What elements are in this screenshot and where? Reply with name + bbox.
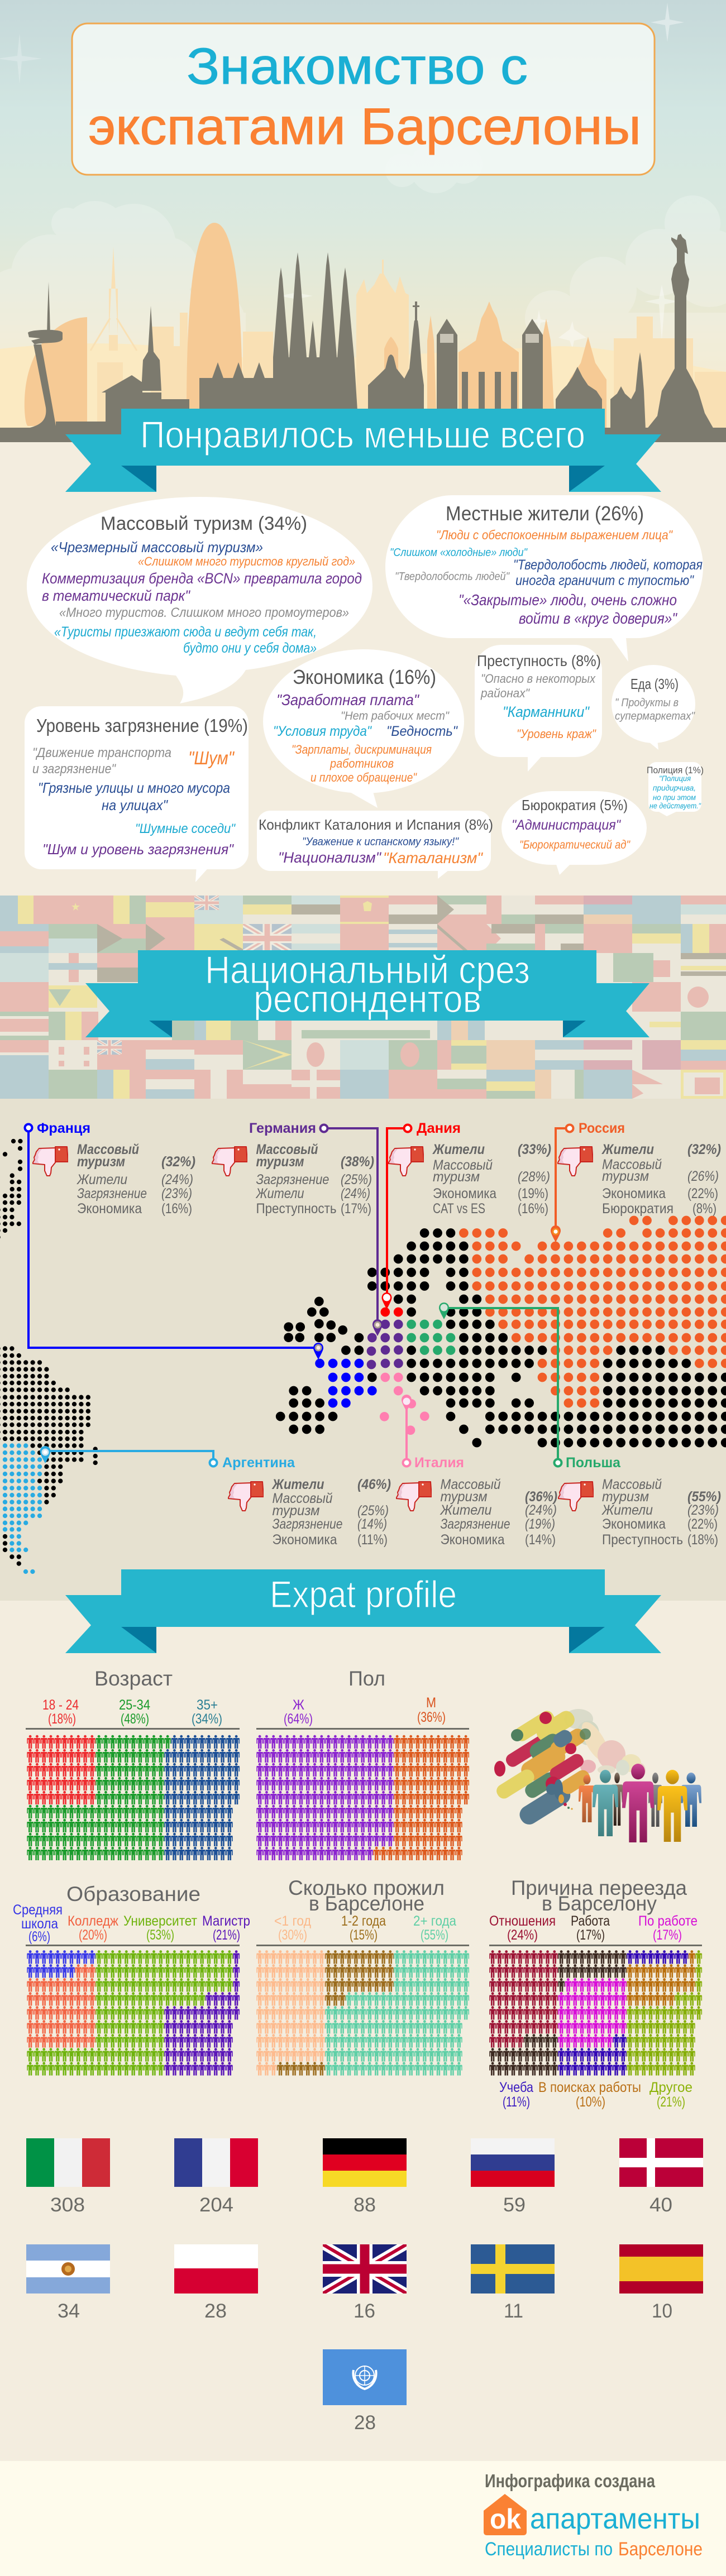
legend: (21%) bbox=[213, 1927, 240, 1943]
heading bbox=[511, 1876, 687, 1915]
ranking: Poland: Преступность bbox=[602, 1532, 683, 1548]
chart: gender bbox=[256, 1667, 469, 1860]
tagline: Специалисты по bbox=[485, 2539, 613, 2560]
ranking: Poland: (22%) bbox=[687, 1516, 718, 1532]
ranking: Denmark bbox=[388, 1142, 551, 1217]
section banner: expat profile bbox=[65, 1569, 661, 1653]
ranking: Denmark: (19%) bbox=[518, 1186, 548, 1201]
ranking: Russia: (26%) bbox=[687, 1169, 719, 1184]
ranking: Argentina: Массовый bbox=[273, 1491, 333, 1506]
ranking: Russia: Бюрократия bbox=[602, 1201, 674, 1217]
top legend: (24%) bbox=[507, 1927, 538, 1943]
ranking: Italy: Экономика bbox=[440, 1532, 505, 1548]
ranking: France: Экономика bbox=[77, 1201, 142, 1217]
dot map: Americas bbox=[0, 1141, 95, 1572]
quotes: "Бедность" bbox=[386, 724, 458, 739]
legend: 35+ bbox=[197, 1697, 218, 1713]
ranking: Denmark: Массовый bbox=[433, 1157, 493, 1173]
ranking: Poland bbox=[558, 1477, 721, 1548]
legend: 2+ года bbox=[413, 1913, 456, 1929]
logo: okapartments: ok bbox=[490, 2503, 521, 2535]
quotes: "Движение транспорта bbox=[32, 745, 171, 760]
ranking: Poland: Экономика bbox=[602, 1516, 666, 1532]
flag: United Nations 28: 28 bbox=[354, 2412, 376, 2434]
logo: okapartments: апартаменты bbox=[530, 2503, 700, 2535]
heading bbox=[288, 1876, 445, 1915]
legend: школа bbox=[21, 1916, 58, 1932]
quotes bbox=[390, 528, 703, 627]
quotes: иногда граничит с тупостью" bbox=[515, 573, 694, 588]
flag: Sweden 11: 11 bbox=[504, 2300, 523, 2322]
tagline: Барселоне bbox=[618, 2539, 703, 2560]
flag: Poland 28 bbox=[174, 2244, 258, 2322]
quotes: работников bbox=[329, 756, 394, 770]
legend: (34%) bbox=[192, 1711, 222, 1727]
ranking: Argentina: (11%) bbox=[357, 1532, 388, 1548]
bottom legend: Учеба bbox=[499, 2080, 533, 2095]
flag: Russia 59: 59 bbox=[503, 2194, 526, 2216]
flag: France 204: 204 bbox=[199, 2194, 233, 2216]
quotes bbox=[42, 539, 362, 656]
chart: reason for moving to Barcelona bbox=[489, 1876, 702, 2110]
quotes: "Шум и уровень загрязнения" bbox=[42, 841, 235, 858]
flag: United Nations 28 bbox=[323, 2349, 407, 2434]
bottom legend: (10%) bbox=[576, 2094, 605, 2110]
connector: Poland: Польша bbox=[566, 1455, 621, 1471]
flag: Denmark 40: 40 bbox=[649, 2194, 672, 2216]
bottom legend bbox=[499, 2080, 692, 2110]
ranking: France: Массовый bbox=[77, 1142, 139, 1157]
quotes: "Администрация" bbox=[512, 817, 621, 833]
connector: France bbox=[25, 1121, 323, 1359]
Argentina dots bbox=[5, 1445, 40, 1572]
flag: Italy 308: 308 bbox=[50, 2194, 85, 2216]
Germany dots bbox=[371, 1324, 399, 1364]
bubble: crime bbox=[475, 645, 602, 772]
ranking: Germany bbox=[212, 1142, 374, 1217]
quotes: войти в «круг доверия»" bbox=[519, 610, 677, 627]
section banner: national breakdown bbox=[85, 948, 649, 1037]
ranking: Italy: туризм bbox=[440, 1489, 487, 1505]
quotes: "Люди с обеспокоенным выражением лица" bbox=[436, 528, 674, 542]
legend: Университет bbox=[123, 1913, 197, 1929]
logo: okapartments bbox=[484, 2494, 700, 2535]
heading: Конфликт Каталония и Испания (8%) bbox=[259, 816, 493, 833]
quotes: «Чрезмерный массовый туризм» bbox=[51, 539, 263, 556]
quotes: Коммертизация бренда «BCN» превратила город bbox=[42, 570, 362, 587]
France dots bbox=[320, 1363, 372, 1403]
ranking: Poland: туризм bbox=[602, 1489, 649, 1505]
ranking: France: (32%) bbox=[161, 1154, 195, 1170]
flag: Germany 88: 88 bbox=[354, 2194, 376, 2216]
connector: Russia bbox=[551, 1121, 625, 1242]
ranking: Poland: Массовый bbox=[602, 1477, 662, 1492]
Russia dots bbox=[464, 1220, 726, 1403]
quotes bbox=[512, 817, 631, 851]
legend: (30%) bbox=[278, 1927, 307, 1943]
ranking: Poland: (55%) bbox=[687, 1489, 721, 1505]
illustration: crowd with speech bubble cloud bbox=[474, 1699, 701, 1842]
flag: United Kingdom 16 bbox=[323, 2244, 407, 2322]
connector: Germany: Германия bbox=[249, 1121, 316, 1136]
bubble: food bbox=[612, 665, 695, 750]
credit line: Инфографика создана bbox=[485, 2470, 656, 2491]
legend: Колледж bbox=[68, 1913, 118, 1929]
connector: Denmark: Дания bbox=[417, 1121, 461, 1136]
quotes: "Уровень краж" bbox=[517, 727, 596, 741]
bubble: locals bbox=[385, 495, 703, 662]
quotes: "Карманники" bbox=[503, 703, 590, 720]
ranking: Argentina: (25%) bbox=[357, 1503, 389, 1519]
ranking: Italy bbox=[396, 1477, 557, 1548]
ranking: Denmark: (28%) bbox=[518, 1169, 550, 1185]
footer: credit bbox=[484, 2470, 703, 2560]
quotes bbox=[480, 672, 596, 741]
flag: Russia 59 bbox=[471, 2138, 555, 2216]
legend bbox=[13, 1902, 250, 1945]
connector: Italy bbox=[402, 1395, 464, 1471]
legend: (53%) bbox=[146, 1927, 174, 1943]
quotes: придирчива, bbox=[653, 783, 696, 792]
legend bbox=[42, 1697, 222, 1727]
top legend: Отношения bbox=[489, 1913, 556, 1929]
legend: Ж bbox=[293, 1697, 304, 1713]
ranking: Argentina: (14%) bbox=[357, 1516, 387, 1532]
connector: Argentina bbox=[40, 1446, 295, 1471]
ranking: Italy: Массовый bbox=[440, 1477, 501, 1492]
ranking: Denmark: Экономика bbox=[433, 1186, 496, 1201]
Denmark dots bbox=[385, 1308, 399, 1316]
legend: (20%) bbox=[79, 1927, 107, 1943]
ranking: Argentina: Жители bbox=[271, 1477, 324, 1492]
banner heading: Понравилось меньше всего bbox=[140, 414, 585, 456]
connector: France: Франця bbox=[37, 1121, 90, 1136]
quotes: супермаркетах" bbox=[615, 710, 695, 722]
flag: Spain 10 bbox=[619, 2244, 703, 2322]
connector: Germany bbox=[249, 1121, 383, 1336]
ranking: France: Загрязнение bbox=[77, 1186, 147, 1201]
heading: Сколько прожил bbox=[288, 1876, 445, 1899]
heading: Бюрократия (5%) bbox=[522, 797, 628, 813]
heading: в Барселону bbox=[542, 1892, 657, 1915]
bubble: mass tourism bbox=[27, 497, 372, 703]
pictogram bbox=[256, 1950, 469, 2076]
legend: (36%) bbox=[417, 1710, 446, 1725]
pictogram bbox=[27, 1735, 240, 1860]
connector: Italy: Италия bbox=[414, 1455, 464, 1471]
quotes: "Твердолобость людей" bbox=[395, 571, 510, 583]
legend: <1 год bbox=[274, 1913, 311, 1929]
ranking: Russia bbox=[557, 1142, 721, 1217]
quotes: «Много туристов. Слишком много промоутеров» bbox=[59, 605, 349, 620]
title line 2: экспатами Барселоны bbox=[88, 98, 641, 155]
flag: Argentina 34 bbox=[26, 2244, 110, 2322]
dot map: Europe and Russia bbox=[280, 1220, 726, 1443]
quotes: "Шумные соседи" bbox=[135, 821, 236, 836]
pictogram bbox=[27, 1950, 240, 2076]
ranking: Poland: (23%) bbox=[687, 1502, 719, 1518]
ranking: Denmark: CAT vs ES bbox=[433, 1201, 485, 1217]
banner heading line 2: респондентов bbox=[254, 977, 481, 1021]
speech bubble cloud bbox=[474, 1699, 646, 1831]
ranking: Germany: (17%) bbox=[341, 1201, 371, 1217]
ranking: Russia: туризм bbox=[602, 1169, 649, 1184]
ranking: Argentina bbox=[228, 1477, 391, 1548]
quotes: "Опасно в некоторых bbox=[481, 672, 596, 686]
heading: Местные жители (26%) bbox=[446, 502, 644, 525]
quotes: "Каталанизм" bbox=[383, 849, 483, 866]
heading: Возраст bbox=[94, 1667, 173, 1690]
people bbox=[579, 1764, 701, 1842]
ranking: Germany: Загрязнение bbox=[256, 1172, 329, 1188]
legend: (48%) bbox=[121, 1711, 149, 1727]
legend: (18%) bbox=[48, 1711, 76, 1727]
bubble: bureaucracy bbox=[501, 791, 647, 875]
ranking: Denmark: (16%) bbox=[518, 1201, 548, 1217]
quotes: "Грязные улицы и много мусора bbox=[38, 779, 230, 796]
bubble: economy bbox=[263, 649, 464, 808]
legend: (15%) bbox=[350, 1927, 378, 1943]
legend: М bbox=[426, 1695, 436, 1711]
legend: (64%) bbox=[284, 1711, 313, 1727]
quotes: будто они у себя дома» bbox=[183, 640, 317, 656]
top legend bbox=[489, 1913, 698, 1943]
heading: Уровень загрязнение (19%) bbox=[36, 715, 248, 736]
ranking: Argentina: Экономика bbox=[273, 1532, 337, 1548]
ranking: Denmark: (33%) bbox=[518, 1142, 551, 1157]
heading: Полиция (1%) bbox=[647, 765, 704, 775]
flag: France 204 bbox=[174, 2138, 258, 2216]
North America dots bbox=[0, 1141, 95, 1564]
quotes: «Туристы приезжают сюда и ведут себя так, bbox=[54, 624, 317, 640]
ranking: Denmark: Жители bbox=[432, 1142, 485, 1157]
top legend: (17%) bbox=[576, 1927, 605, 1943]
ranking: Italy: (14%) bbox=[525, 1532, 556, 1548]
quotes: "Твердолобость людей, которая bbox=[513, 557, 703, 573]
legend: (55%) bbox=[421, 1927, 448, 1943]
Italy dots bbox=[384, 1377, 424, 1430]
flag: Denmark 40 bbox=[619, 2138, 703, 2216]
ranking: Germany: (25%) bbox=[341, 1172, 372, 1188]
flag: Spain 10: 10 bbox=[652, 2300, 672, 2322]
quotes: "Зарплаты, дискриминация bbox=[292, 743, 432, 756]
ranking: Russia: (22%) bbox=[687, 1186, 718, 1201]
flag: United Kingdom 16: 16 bbox=[354, 2300, 375, 2322]
legend bbox=[274, 1913, 456, 1943]
ranking: Denmark: туризм bbox=[433, 1169, 480, 1185]
ranking: France: Жители bbox=[76, 1172, 127, 1188]
legend: 25-34 bbox=[119, 1697, 150, 1713]
ranking: Russia: Жители bbox=[601, 1142, 654, 1157]
heading: в Барселоне bbox=[309, 1892, 424, 1915]
top legend: (17%) bbox=[653, 1927, 682, 1943]
top legend: По работе bbox=[638, 1913, 698, 1929]
banner heading line 1: Национальный срез bbox=[205, 948, 530, 992]
legend: (6%) bbox=[28, 1929, 50, 1945]
legend: 18 - 24 bbox=[42, 1697, 79, 1713]
chart: age bbox=[26, 1667, 240, 1860]
ranking: Poland: Жители bbox=[601, 1502, 653, 1518]
ranking: France: (23%) bbox=[161, 1186, 192, 1201]
heading: Массовый туризм (34%) bbox=[101, 513, 307, 534]
bottom legend: Другое bbox=[649, 2080, 692, 2095]
ranking: Poland: (18%) bbox=[687, 1532, 718, 1548]
quotes: "Нет рабочих мест" bbox=[341, 710, 450, 722]
flag: Argentina 34: 34 bbox=[58, 2300, 80, 2322]
ranking: Argentina: (46%) bbox=[357, 1477, 391, 1492]
ranking: Italy: (24%) bbox=[525, 1502, 557, 1518]
ranking: France bbox=[32, 1142, 195, 1217]
quotes: "Слишком «холодные» люди" bbox=[390, 547, 528, 559]
connector: Russia: Россия bbox=[579, 1121, 625, 1136]
flag: Poland 28: 28 bbox=[204, 2300, 227, 2322]
quotes bbox=[273, 691, 458, 784]
top legend: Работа bbox=[571, 1913, 610, 1929]
title box bbox=[72, 23, 655, 175]
ranking: Germany: Массовый bbox=[256, 1142, 318, 1157]
legend: Магистр bbox=[202, 1913, 250, 1929]
quotes: "Бюрократический ад" bbox=[519, 839, 631, 851]
flag: Italy 308 bbox=[26, 2138, 110, 2216]
heading: Образование bbox=[66, 1883, 200, 1905]
quotes: «Слишком много туристов круглый год» bbox=[138, 554, 355, 568]
quotes bbox=[615, 697, 695, 722]
ranking: Russia: (32%) bbox=[687, 1142, 721, 1157]
ranking: Italy: Загрязнение bbox=[440, 1516, 510, 1532]
connector: Denmark bbox=[382, 1121, 461, 1309]
quotes: "Национализм" bbox=[278, 849, 381, 866]
heading: Пол bbox=[348, 1667, 385, 1690]
ranking: Russia: (8%) bbox=[692, 1201, 717, 1217]
bottom legend: (21%) bbox=[657, 2094, 685, 2110]
legend bbox=[284, 1695, 446, 1727]
ranking: Italy: Жители bbox=[440, 1502, 492, 1518]
connector: Poland bbox=[439, 1303, 621, 1471]
ranking: Germany: туризм bbox=[256, 1154, 304, 1170]
tagline bbox=[485, 2539, 703, 2560]
quotes: "Заработная плата" bbox=[276, 691, 419, 708]
legend: 1-2 года bbox=[341, 1913, 386, 1929]
quotes bbox=[32, 745, 236, 858]
quotes: "Условия труда" bbox=[273, 724, 372, 739]
flag: Germany 88 bbox=[323, 2138, 407, 2216]
quotes: в тематический парк" bbox=[42, 587, 190, 604]
legend: Средняя bbox=[13, 1902, 63, 1918]
ranking: Russia: Экономика bbox=[602, 1186, 666, 1201]
ranking: Italy: (19%) bbox=[525, 1516, 555, 1532]
bottom legend: (11%) bbox=[503, 2094, 530, 2110]
quotes: и загрязнение" bbox=[32, 762, 116, 777]
ranking: Germany: (24%) bbox=[341, 1186, 370, 1201]
quotes: районах" bbox=[480, 686, 530, 700]
quotes: не действует." bbox=[649, 801, 701, 810]
Barcelona skyline bbox=[0, 223, 726, 442]
heading: Преступность (8%) bbox=[477, 652, 601, 669]
header sky with clouds bbox=[0, 0, 726, 430]
quotes: "Шум" bbox=[188, 748, 235, 768]
other countries dots bbox=[280, 1233, 726, 1443]
title line 1: Знакомство с bbox=[187, 38, 528, 95]
banner heading: Expat profile bbox=[270, 1573, 457, 1616]
ranking: Italy: (36%) bbox=[525, 1489, 557, 1505]
bottom legend: В поисках работы bbox=[538, 2080, 641, 2095]
ranking: Germany: Преступность bbox=[256, 1201, 336, 1217]
ranking: Germany: (38%) bbox=[341, 1154, 374, 1170]
ranking: Argentina: Загрязнение bbox=[273, 1516, 343, 1532]
Poland dots bbox=[412, 1324, 451, 1350]
quotes: и плохое обращение" bbox=[311, 770, 417, 784]
quotes bbox=[649, 774, 701, 810]
chart: education bbox=[13, 1883, 250, 2076]
bubble: police bbox=[647, 762, 704, 816]
ranking: France: (16%) bbox=[161, 1201, 192, 1217]
quotes: "Уважение к испанскому языку!" bbox=[302, 836, 459, 848]
ranking: Germany: Жители bbox=[255, 1186, 304, 1201]
quotes: но при этом bbox=[653, 793, 696, 802]
quotes: на улицах" bbox=[102, 797, 169, 813]
flag: Sweden 11 bbox=[471, 2244, 555, 2322]
quotes: "«Закрытые» люди, очень сложно bbox=[458, 591, 677, 609]
chart: time lived in Barcelona bbox=[256, 1876, 469, 2076]
section banner: least liked bbox=[65, 409, 661, 492]
heading: Экономика (16%) bbox=[293, 665, 436, 688]
pictogram bbox=[256, 1735, 469, 1860]
bubble: pollution bbox=[25, 706, 249, 882]
heading: Причина переезда bbox=[511, 1876, 687, 1899]
quotes: "Полиция bbox=[659, 774, 691, 783]
ranking: Argentina: туризм bbox=[273, 1503, 319, 1519]
ranking: Russia: Массовый bbox=[602, 1157, 662, 1172]
pictogram bbox=[489, 1950, 702, 2076]
quotes bbox=[278, 836, 483, 866]
connector: Argentina: Аргентина bbox=[222, 1455, 295, 1471]
quotes: " Продукты в bbox=[615, 697, 679, 709]
flags mosaic background bbox=[0, 896, 726, 1099]
ranking: France: туризм bbox=[77, 1154, 125, 1170]
bubble: Catalonia vs Spain conflict bbox=[257, 811, 493, 879]
ranking: France: (24%) bbox=[161, 1172, 193, 1188]
heading: Еда (3%) bbox=[631, 676, 679, 692]
